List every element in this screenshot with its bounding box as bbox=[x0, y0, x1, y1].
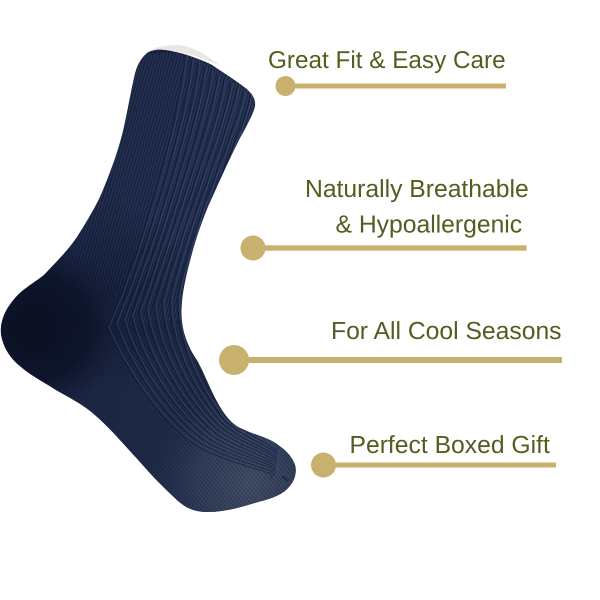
knit texture on foot bbox=[60, 323, 296, 512]
callout: perfect boxed gift bbox=[311, 432, 556, 478]
callout: naturally breathable and hypoallergenic bbox=[240, 176, 529, 260]
connector line bbox=[253, 245, 526, 251]
dark rib grooves bbox=[107, 55, 278, 475]
label text: Perfect Boxed Gift bbox=[350, 432, 550, 459]
label text: Naturally Breathable bbox=[305, 176, 529, 203]
marker dot bbox=[276, 76, 296, 96]
label text second line: & Hypoallergenic bbox=[336, 212, 522, 238]
infographic canvas bbox=[0, 45, 562, 512]
sock inner lip bbox=[148, 45, 222, 67]
marker dot bbox=[240, 236, 266, 260]
light rib highlights bbox=[109, 55, 280, 475]
callout: great fit and easy care bbox=[268, 47, 506, 96]
ankle shadow bbox=[30, 215, 160, 324]
knit texture on leg bbox=[50, 40, 260, 327]
foot base tone bbox=[0, 320, 300, 520]
sock shading and ribs bbox=[0, 40, 310, 520]
heel shadow bbox=[0, 252, 112, 400]
connector line bbox=[285, 84, 506, 88]
label text: For All Cool Seasons bbox=[331, 318, 562, 345]
sock body bbox=[1, 50, 296, 512]
connector line bbox=[234, 357, 562, 363]
connector line bbox=[323, 462, 556, 468]
callout: for all cool seasons bbox=[219, 318, 562, 375]
label text: Great Fit & Easy Care bbox=[268, 47, 506, 74]
toe crease bbox=[282, 476, 288, 481]
sock illustration bbox=[0, 40, 310, 520]
top edge fray bbox=[147, 52, 247, 90]
toe seam bbox=[270, 447, 277, 480]
marker dot bbox=[219, 345, 249, 375]
marker dot bbox=[311, 452, 336, 478]
toe tint bbox=[168, 407, 296, 512]
